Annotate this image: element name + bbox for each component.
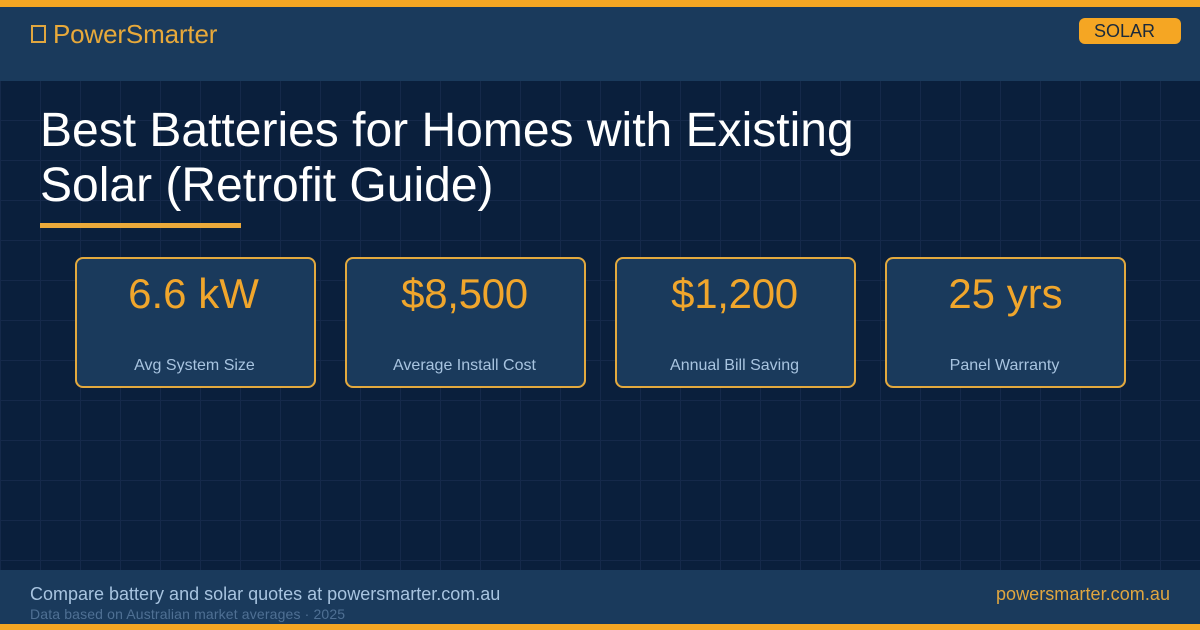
value: $8,500: [401, 270, 528, 317]
title: Best Batteries for Homes with Existing Solar (Retrofit Guide): [40, 104, 854, 212]
title underline: [40, 223, 241, 228]
footer url: powersmarter.com.au: [996, 584, 1170, 604]
footer call to action: Compare battery and solar quotes at powersmarter.com.au: [30, 584, 500, 604]
value: $1,200: [671, 270, 798, 317]
label: Average Install Cost: [393, 357, 536, 374]
stat card: warranty: [885, 257, 1126, 388]
stat card: bill saving: [615, 257, 856, 388]
bottom accent bar: [0, 624, 1200, 630]
value: 6.6 kW: [128, 270, 259, 317]
icon: logo placeholder box: [31, 25, 46, 43]
label: Avg System Size: [134, 357, 255, 374]
stat card: install cost: [345, 257, 586, 388]
top accent bar: [0, 0, 1200, 7]
footer band: [0, 570, 1200, 630]
stat card: system size: [75, 257, 316, 388]
badge: solar: [1079, 18, 1181, 44]
brand name: PowerSmarter: [53, 19, 217, 49]
footer data note: Data based on Australian market averages · 2025: [30, 606, 345, 622]
label: Panel Warranty: [950, 357, 1059, 374]
value: 25 yrs: [948, 270, 1063, 317]
label: Annual Bill Saving: [670, 357, 799, 374]
badge: solar: SOLAR: [1094, 21, 1155, 41]
header band: [0, 0, 1200, 81]
